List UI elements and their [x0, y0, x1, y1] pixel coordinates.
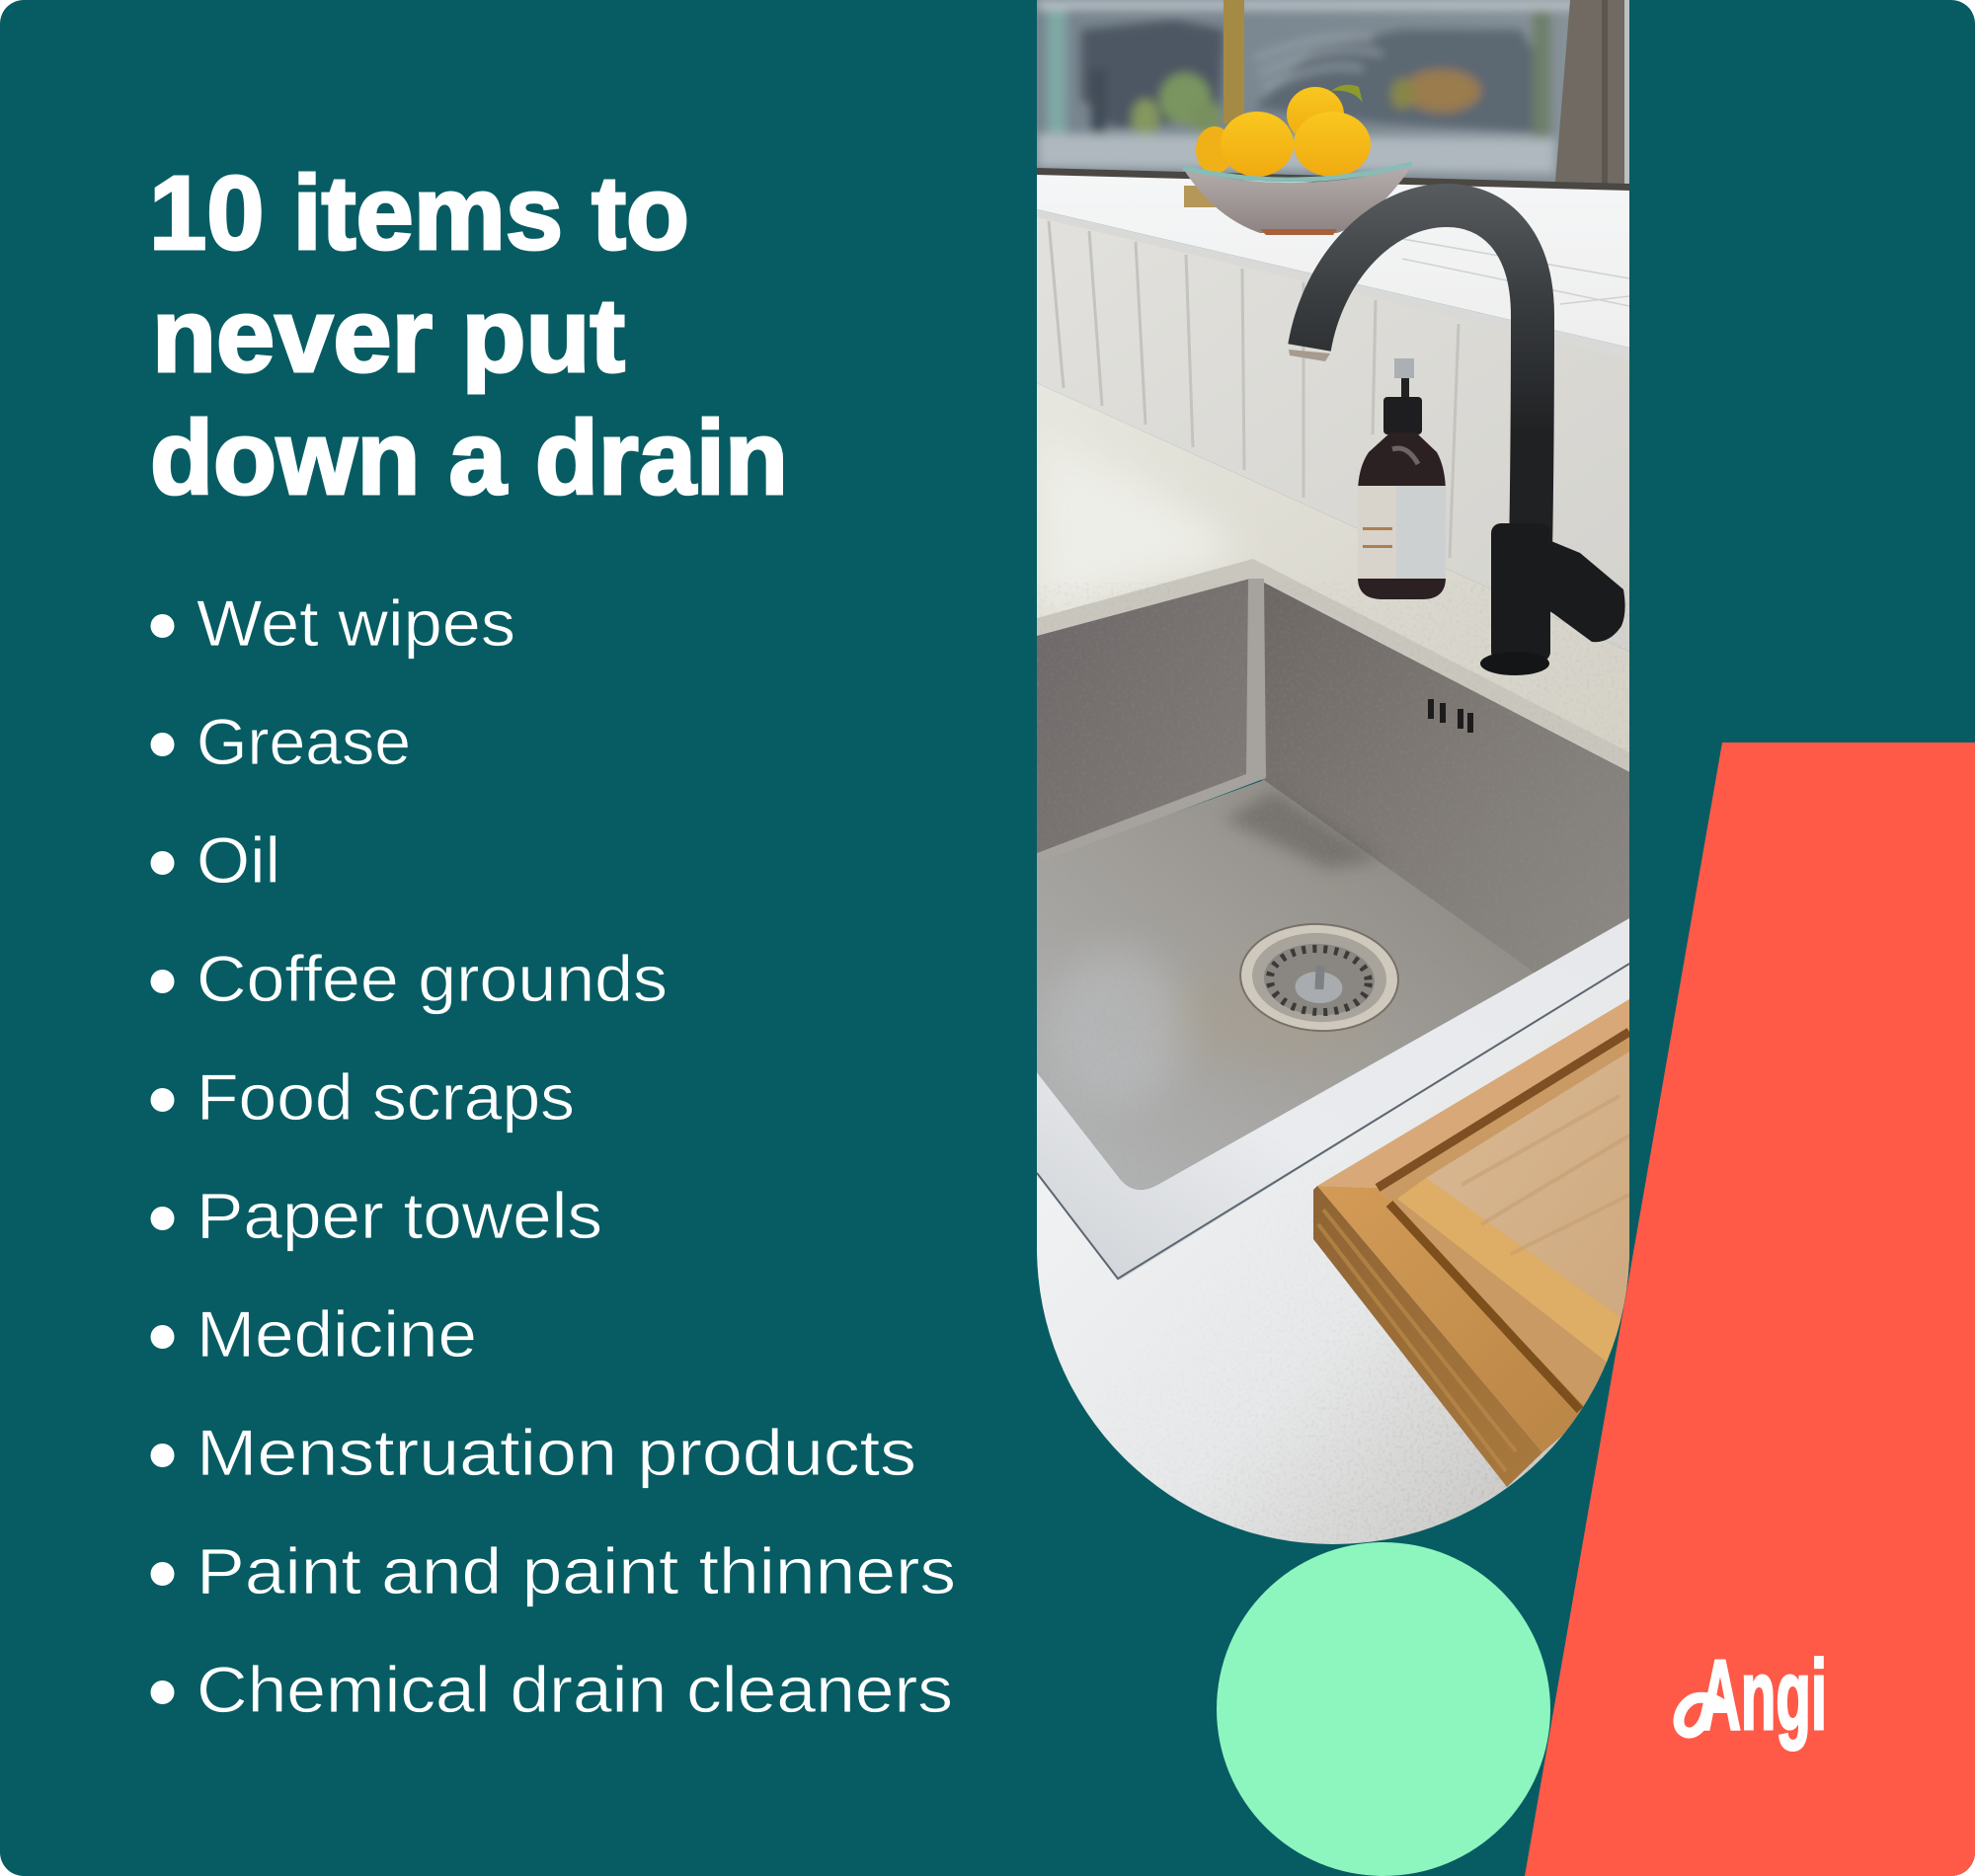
logo: Angi: Angi: [1699, 1640, 1827, 1751]
brass pole: [1224, 0, 1244, 123]
sink floor: [1037, 780, 1537, 1190]
cutting board: [1313, 999, 1629, 1487]
sink rim back edge: [1037, 559, 1629, 772]
lower counter top: [1037, 964, 1629, 1580]
sink right wall: [1256, 579, 1629, 974]
list of items: [150, 586, 956, 1726]
title: [152, 172, 783, 496]
list item: oil: Oil: [197, 823, 280, 897]
window frame: [1037, 0, 1629, 192]
list item: chemical drain cleaners: Chemical drain cleaners: [197, 1653, 953, 1726]
list item: grease: [150, 719, 408, 764]
mint circle: [1217, 1542, 1550, 1876]
list item: wet wipes: Wet wipes: [197, 586, 515, 660]
list item: paper towels: Paper towels: [197, 1179, 602, 1252]
panelled wall: [1037, 217, 1629, 652]
soap bottle: [1358, 358, 1446, 599]
list item: menstruation products: Menstruation products: [197, 1416, 916, 1489]
drain strainer: [1237, 920, 1401, 1035]
title: never put: [152, 277, 625, 394]
list item: grease: Grease: [197, 705, 411, 778]
sink overflow slots: [1428, 699, 1473, 733]
fruit bowl with lemons: [1183, 85, 1412, 235]
sink left wall: [1037, 579, 1256, 857]
logo: Angi: [1679, 1640, 1827, 1751]
title: 10 items to: [149, 155, 689, 272]
photo: kitchen sink: [1037, 0, 1629, 1580]
counter top: [1037, 383, 1629, 760]
white window ledge: [1037, 175, 1629, 348]
list item: paint and paint thinners: Paint and paint thinners: [197, 1534, 956, 1607]
faucet: [1289, 205, 1625, 675]
coral panel: [1525, 743, 1975, 1876]
sink fold: [1037, 579, 1266, 865]
list item: food scraps: Food scraps: [197, 1060, 575, 1133]
list item: coffee grounds: Coffee grounds: [197, 942, 668, 1015]
stainless rim: [1037, 918, 1629, 1280]
list item: medicine: [150, 1309, 474, 1357]
title: down a drain: [150, 400, 788, 516]
window view: [1037, 0, 1570, 182]
list item: oil: [150, 835, 276, 883]
list item: medicine: Medicine: [197, 1297, 477, 1370]
